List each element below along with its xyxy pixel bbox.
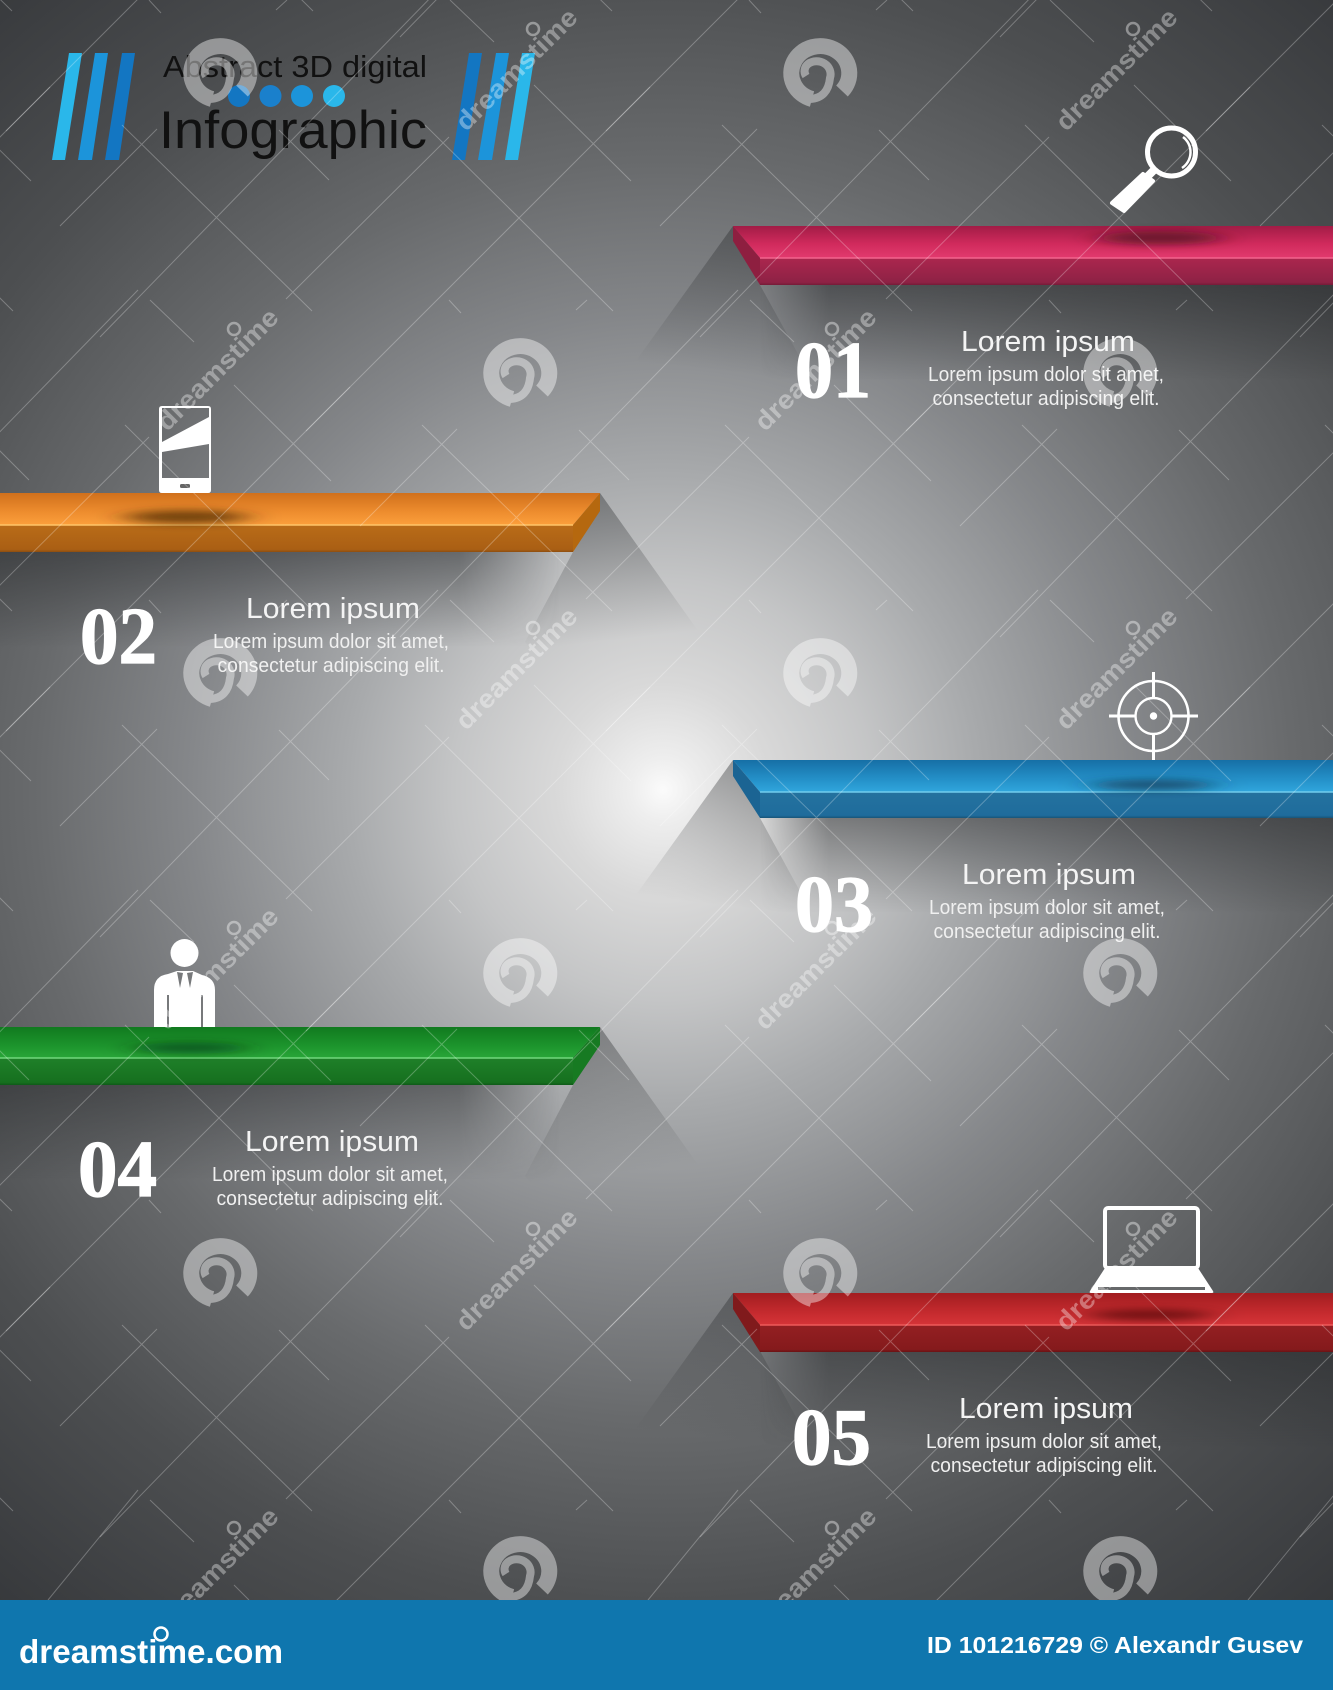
heading: Lorem ipsum — [245, 1126, 419, 1158]
logo line 1: Abstract 3D digital — [163, 49, 427, 84]
description: Lorem ipsum dolor sit amet, — [929, 897, 1165, 919]
panel: item 05 — [733, 1208, 1333, 1482]
heading: Lorem ipsum — [246, 593, 420, 625]
description — [212, 1164, 448, 1210]
description — [926, 1431, 1162, 1477]
watermark overlay: dreamstime — [150, 1501, 284, 1635]
footer logo: dreamstime.com — [19, 1633, 283, 1670]
panel: item 03 — [733, 672, 1333, 949]
description — [929, 897, 1165, 943]
shelf: orange — [0, 493, 600, 552]
description: Lorem ipsum dolor sit amet, — [926, 1431, 1162, 1453]
icon: smartphone — [159, 406, 211, 493]
number 04: 04 — [78, 1126, 157, 1214]
icon: target — [1109, 672, 1198, 760]
watermark overlay: dreamstime — [449, 1202, 583, 1336]
panel: item 02 — [0, 406, 600, 681]
watermark overlay: dreamstime — [1049, 1202, 1183, 1336]
left bars — [52, 53, 135, 160]
description: Lorem ipsum dolor sit amet, — [213, 631, 449, 653]
heading: Lorem ipsum — [961, 326, 1135, 358]
description: Lorem ipsum dolor sit amet, — [928, 364, 1164, 386]
icon: magnifier — [1112, 128, 1196, 211]
right bars — [452, 53, 535, 160]
number 03: 03 — [795, 861, 873, 949]
description: Lorem ipsum dolor sit amet, — [212, 1164, 448, 1186]
shelf: crimson — [733, 226, 1333, 285]
heading: Lorem ipsum — [962, 859, 1136, 891]
icon: laptop — [1090, 1208, 1213, 1293]
description — [213, 631, 449, 677]
footer credit: ID 101216729 © Alexandr Gusev — [927, 1632, 1303, 1658]
watermark overlay: dreamstime — [449, 601, 583, 735]
description: consectetur adipiscing elit. — [930, 1455, 1158, 1477]
heading: Lorem ipsum — [959, 1393, 1133, 1425]
shelf: red — [733, 1293, 1333, 1352]
shelf: blue — [733, 760, 1333, 818]
description: consectetur adipiscing elit. — [934, 921, 1160, 943]
footer banner — [0, 1600, 1333, 1690]
logo dots — [228, 85, 345, 107]
watermark overlay: dreamstime — [150, 302, 284, 436]
watermark overlay: dreamstime — [748, 1501, 882, 1635]
shadows cast by shelves — [0, 226, 1333, 1537]
description: consectetur adipiscing elit. — [932, 388, 1160, 410]
watermark overlay: dreamstime — [1049, 601, 1183, 735]
panel: item 04 — [0, 939, 600, 1214]
number 01: 01 — [795, 327, 871, 415]
description: consectetur adipiscing elit. — [216, 1188, 444, 1210]
number 05: 05 — [792, 1394, 871, 1482]
watermark overlay: dreamstime — [150, 901, 284, 1035]
number 02: 02 — [80, 593, 157, 681]
shelf: green — [0, 1027, 600, 1085]
description — [928, 364, 1164, 410]
description: consectetur adipiscing elit. — [218, 655, 444, 677]
watermark overlay: dreamstime — [1049, 2, 1183, 136]
logo line 2: Infographic — [159, 101, 427, 160]
watermark overlay: dreamstime — [449, 2, 583, 136]
panel: item 01 — [733, 128, 1333, 415]
logo block — [52, 49, 535, 160]
watermark overlay: dreamstime — [748, 901, 882, 1035]
watermark overlay: dreamstime — [748, 302, 882, 436]
icon: businessman — [154, 939, 215, 1027]
